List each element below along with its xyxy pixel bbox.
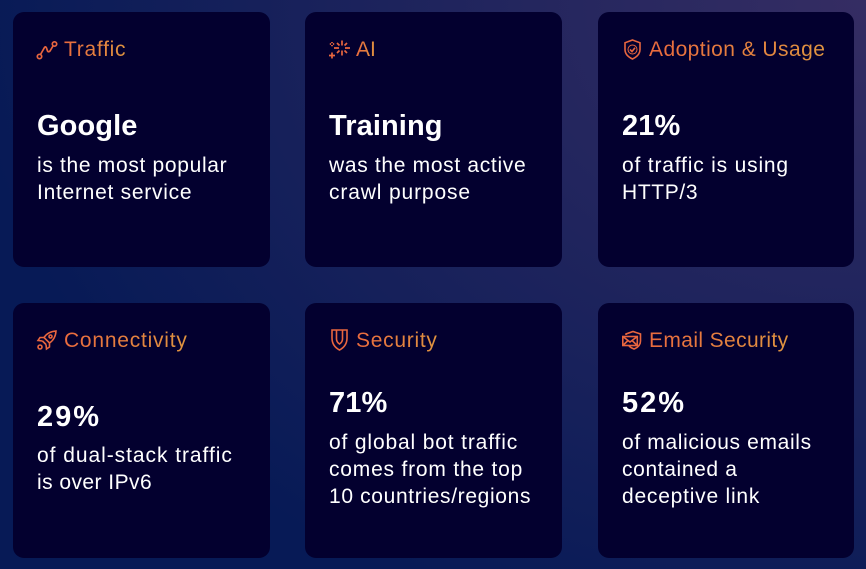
text: Google description [37,154,227,204]
panel: Traffic [13,12,270,267]
text: IPv6 description: of dual-stack traffic [37,444,233,467]
heading: Adoption & Usage: Adoption & Usage [649,38,825,61]
text: malicious emails description: deceptive link [622,485,760,508]
text: Google description: is the most popular [37,154,227,177]
panel: Connectivity [13,303,270,558]
text: IPv6 description: is over IPv6 [37,471,152,494]
text: HTTP/3 description: HTTP/3 [622,181,698,204]
panel: Adoption & Usage [598,12,854,267]
panel: Security [305,303,562,558]
text: HTTP/3 description: of traffic is using [622,154,789,177]
panel: Email Security [598,303,854,558]
text: malicious emails description: contained a [622,458,738,481]
stat: 21%: 21% [622,110,680,142]
heading: Security: Security [356,329,438,352]
text: bot traffic description: comes from the top [329,458,523,481]
text: Google description: Internet service [37,181,192,204]
stat: 71%: 71% [329,387,387,419]
text: malicious emails description: of malicious emails [622,431,812,454]
text: Training description [329,154,526,204]
heading: Email Security: Email Security [649,329,789,352]
text: IPv6 description [37,444,233,494]
text: bot traffic description: 10 countries/regions [329,485,531,508]
stat: 29%: 29% [37,401,101,433]
stat: Training: Training [329,110,443,142]
stat: 52%: 52% [622,387,686,419]
heading: Traffic [36,38,126,61]
text: Training description: crawl purpose [329,181,471,204]
text: Training description: was the most active [329,154,526,177]
panel: AI [305,12,562,267]
text: malicious emails description [622,431,812,508]
heading: AI: AI [356,38,376,61]
stat: Google: Google [37,110,138,142]
heading: Traffic: Traffic [64,38,126,61]
heading: AI [329,38,376,61]
heading: Connectivity: Connectivity [64,329,188,352]
text: bot traffic description: of global bot traffic [329,431,518,454]
text: HTTP/3 description [622,154,789,204]
text: bot traffic description [329,431,531,508]
